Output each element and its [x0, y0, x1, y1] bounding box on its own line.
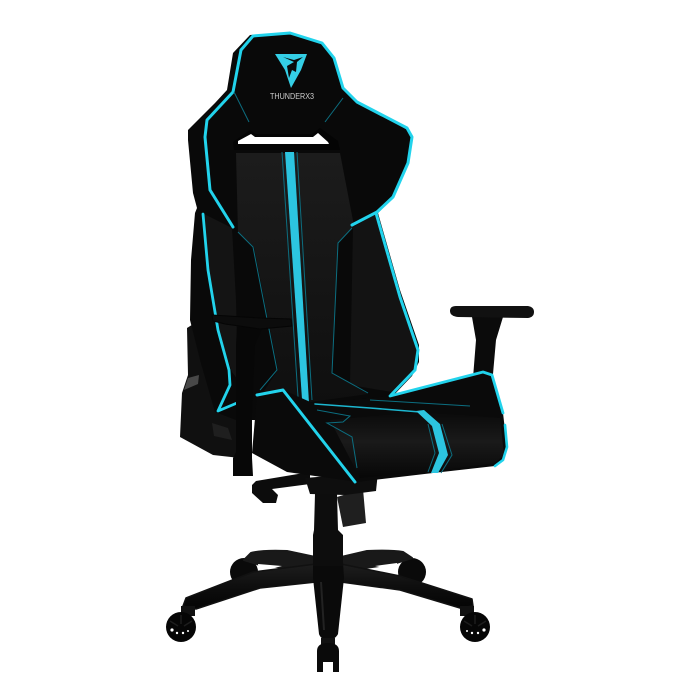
logo emblem: [275, 54, 307, 88]
gas cylinder: [313, 494, 343, 566]
rear base legs: [244, 551, 412, 572]
centre stripe: [285, 152, 309, 403]
backrest: [188, 32, 419, 420]
logo wordmark: THUNDERX3: [270, 91, 314, 101]
backrest shell: [188, 32, 419, 420]
front base legs: [183, 562, 473, 640]
cyan piping: [203, 33, 418, 411]
seat cushion: [252, 372, 507, 482]
seat: [252, 372, 507, 482]
headrest opening: [233, 128, 340, 150]
gaps between base legs: [258, 563, 397, 572]
centre panel: [236, 153, 368, 402]
right armrest: [450, 306, 534, 378]
seat stitching: [317, 400, 470, 473]
front casters: [166, 606, 490, 672]
tilt knob: [337, 489, 366, 527]
side bolsters: [204, 214, 238, 380]
seat cyan piping: [257, 372, 507, 482]
recline mechanism: [180, 323, 240, 458]
tilt lever: [252, 472, 310, 503]
rear casters: [230, 558, 426, 586]
left armrest: [212, 315, 292, 476]
seat top surface: [330, 412, 504, 478]
seat stripe: [416, 410, 448, 473]
under-seat mechanism: [305, 472, 378, 495]
teal stitching: [234, 92, 368, 400]
